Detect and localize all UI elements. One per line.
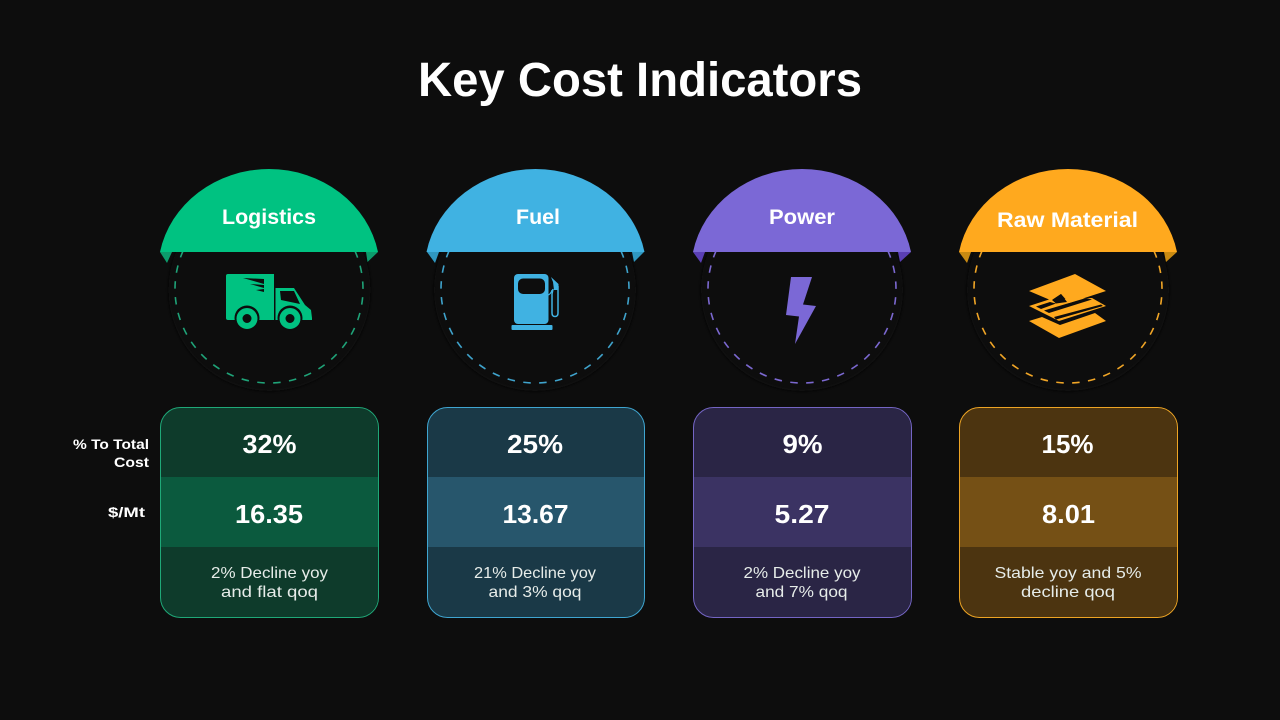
data card: raw material: Stable yoy and 5%	[994, 565, 1142, 582]
header arc: power: Power	[769, 206, 835, 229]
row label: $/Mt: $/Mt	[108, 504, 145, 520]
data card: power: and 7% qoq	[756, 584, 848, 601]
data card: power: 2% Decline yoy	[744, 565, 860, 582]
row label: % to total cost	[73, 436, 149, 470]
data card: raw material: 15%	[1042, 429, 1094, 459]
panel: fuel	[426, 169, 645, 618]
data card: fuel: 21% Decline yoy	[474, 565, 596, 582]
title: Key Cost Indicators	[418, 54, 862, 107]
data card: power: 9%	[782, 429, 822, 459]
icon: material layers	[1029, 274, 1106, 338]
header arc: fuel	[426, 169, 644, 263]
data card: logistics: 16.35	[235, 499, 303, 529]
header arc: power	[693, 169, 911, 263]
panel: power	[693, 169, 912, 617]
data card: power	[693, 408, 912, 618]
data card: fuel: 25%	[507, 429, 563, 459]
data card: logistics: 2% Decline yoy	[211, 565, 328, 582]
header arc: fuel: Fuel	[516, 206, 560, 229]
icon circle: logistics	[168, 188, 370, 391]
icon circle: raw material	[967, 188, 1169, 391]
panel: raw material	[959, 169, 1178, 617]
panel: logistics	[160, 169, 378, 618]
data card: raw material: decline qoq	[1021, 584, 1115, 601]
icon: truck	[226, 274, 312, 330]
icon circle: fuel	[434, 188, 636, 391]
icon: lightning bolt	[786, 277, 816, 344]
data card: fuel: and 3% qoq	[488, 584, 582, 601]
header arc: raw material: Raw Material	[997, 209, 1138, 232]
data card: power: 5.27	[774, 499, 830, 529]
data card: fuel: 13.67	[502, 499, 568, 529]
header arc: raw material	[959, 169, 1177, 263]
header arc: logistics: Logistics	[222, 206, 316, 229]
row label: % to total cost: % To Total	[73, 436, 149, 452]
data card: fuel	[427, 408, 645, 618]
data card: raw material	[959, 408, 1178, 618]
data card: logistics: 32%	[242, 429, 296, 459]
icon circle: power	[701, 188, 903, 391]
row label: % to total cost: Cost	[114, 454, 149, 470]
data card: logistics: and flat qoq	[221, 584, 318, 601]
icon: fuel pump	[512, 274, 558, 330]
data card: logistics	[160, 408, 378, 618]
data card: raw material: 8.01	[1042, 499, 1095, 529]
header arc: logistics	[160, 169, 378, 263]
